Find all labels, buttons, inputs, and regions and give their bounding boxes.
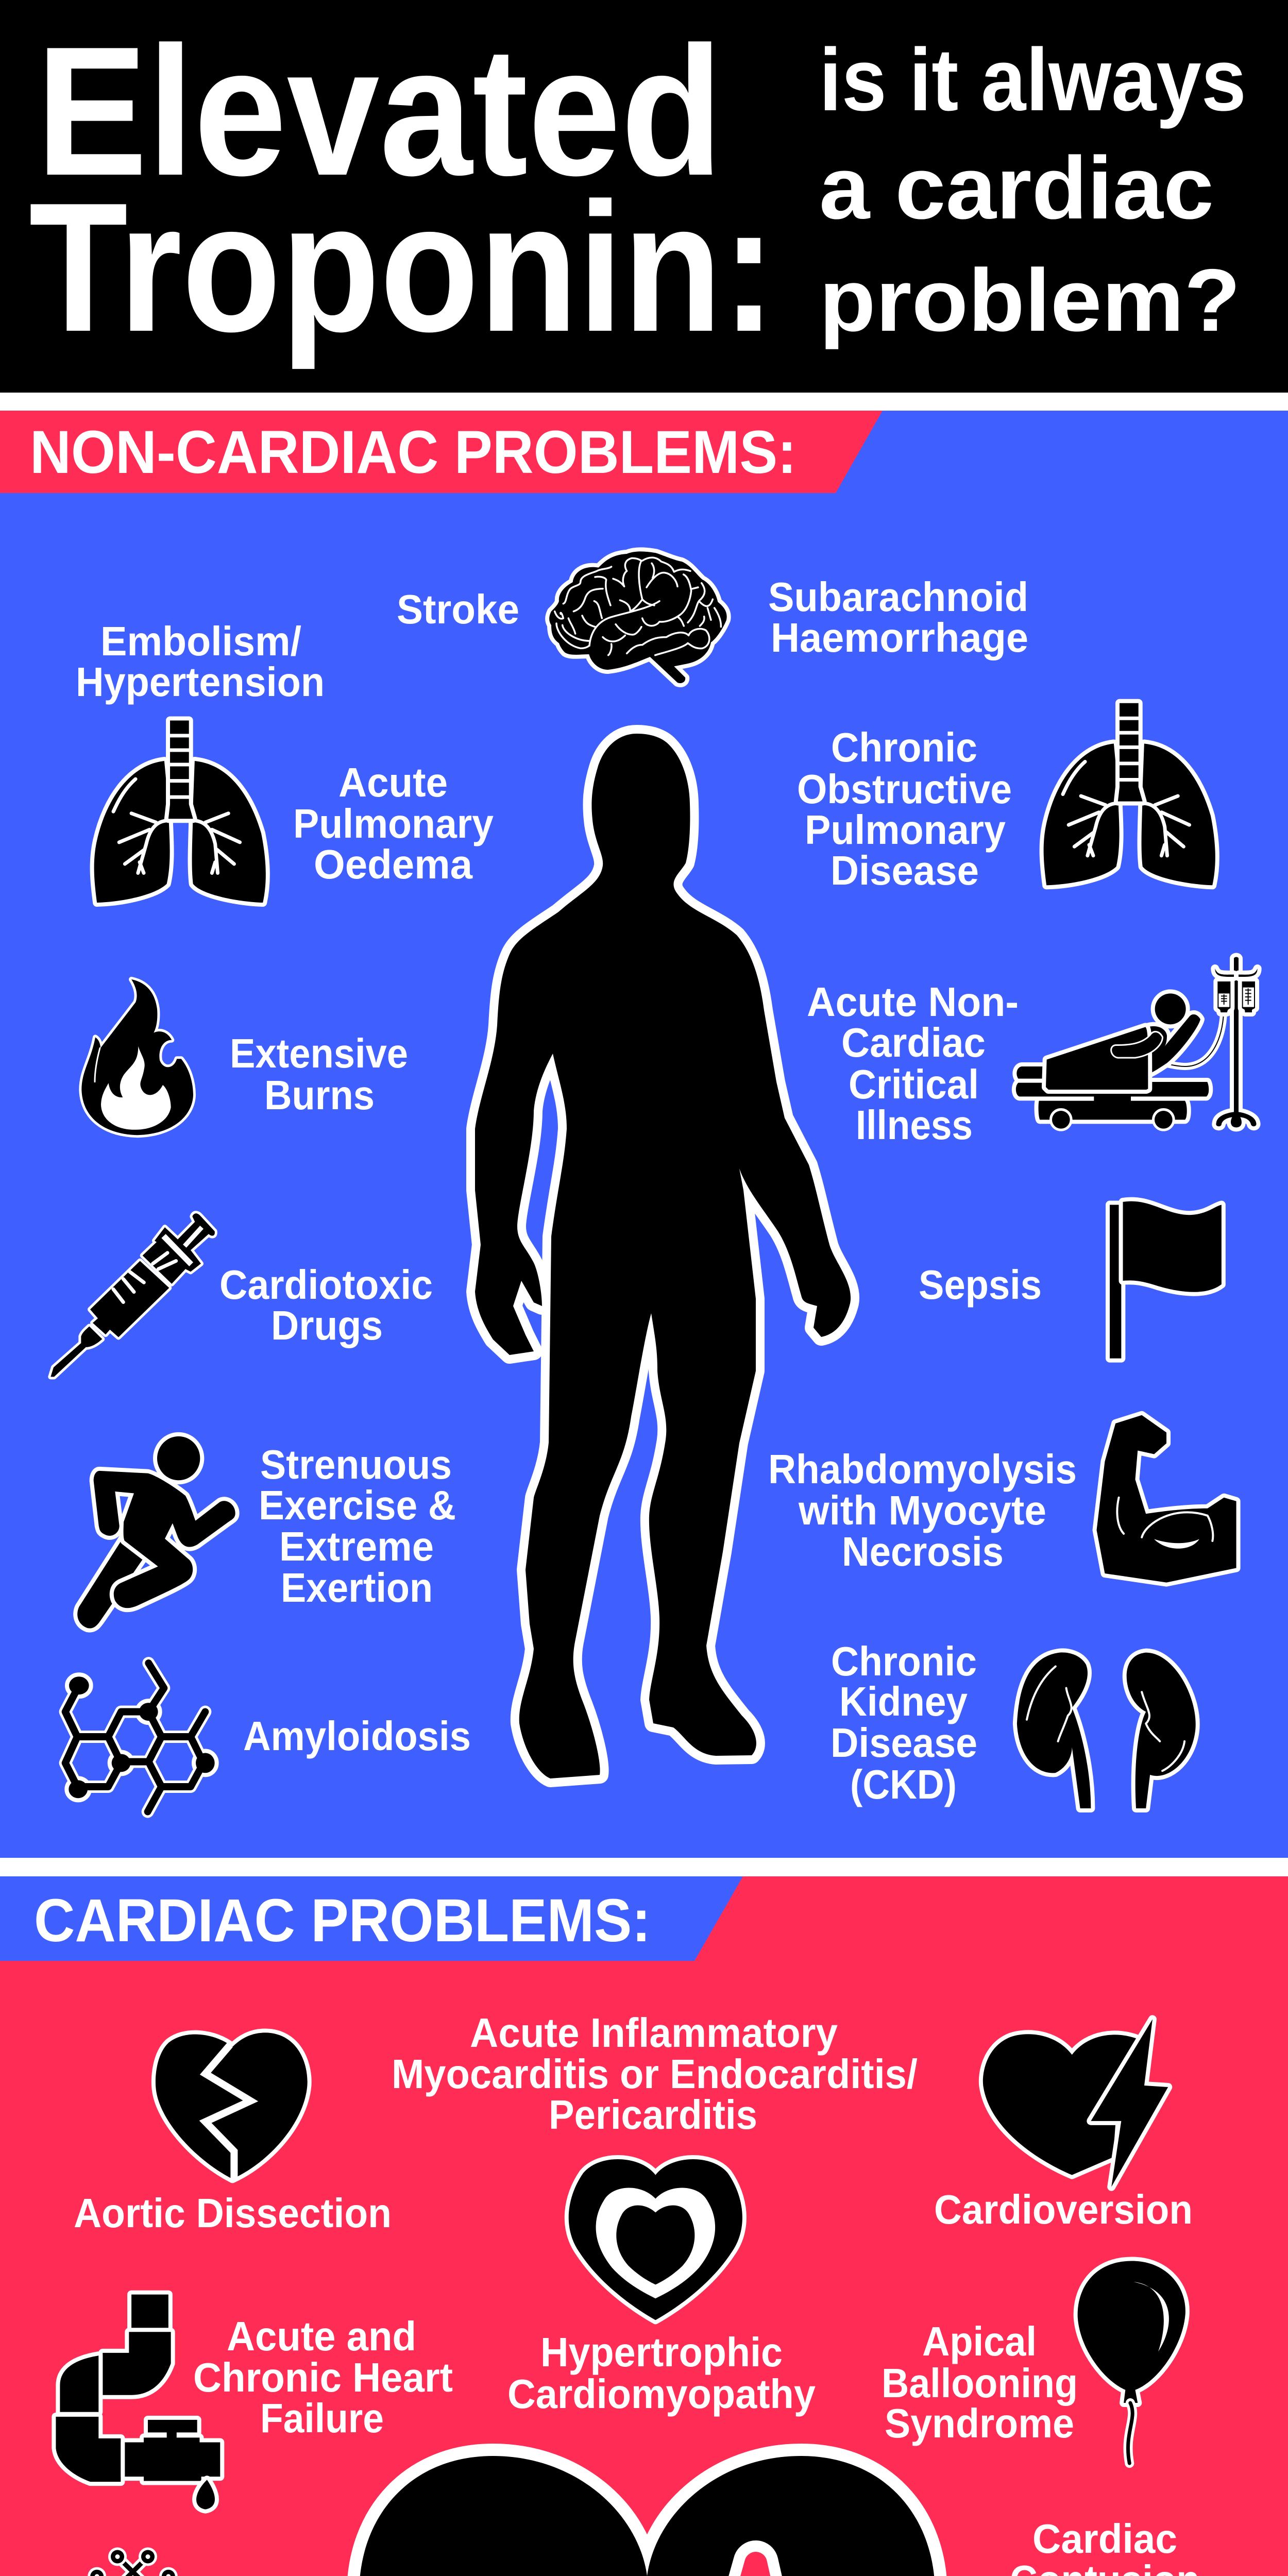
panel: cardiac problems [0, 1876, 1288, 2576]
label: Chronic Obstructive Pulmonary Disease: Disease [831, 848, 979, 893]
label: Rhabdomyolysis with Myocyte Necrosis: with Myocyte [798, 1487, 1046, 1533]
label: Strenuous Exercise & Extreme Exertion: Extreme [279, 1523, 434, 1569]
label: Hypertrophic Cardiomyopathy [507, 2329, 816, 2417]
label: Chronic Kidney Disease (CKD): (CKD) [850, 1761, 957, 1807]
subtitle: problem? [819, 251, 1241, 350]
label: Rhabdomyolysis with Myocyte Necrosis: Necrosis [842, 1529, 1004, 1574]
title [29, 8, 776, 371]
label: Hypertrophic Cardiomyopathy: Cardiomyopathy [507, 2371, 816, 2417]
subtitle: is it always [819, 30, 1246, 129]
label: Extensive Burns: Burns [264, 1072, 375, 1118]
label: Acute Pulmonary Oedema: Acute [338, 759, 448, 805]
icon: pipes and tap [56, 2295, 220, 2510]
label: Subarachnoid Haemorrhage: Haemorrhage [771, 615, 1028, 660]
label: Acute Inflammatory Myocarditis or Endocarditis/ Pericarditis: Acute Inflammatory [470, 2010, 838, 2056]
label: Chronic Kidney Disease (CKD): Disease [831, 1720, 977, 1766]
label: Chronic Obstructive Pulmonary Disease: Chronic [831, 724, 977, 770]
label: Chronic Obstructive Pulmonary Disease [797, 724, 1012, 893]
label: Rhabdomyolysis with Myocyte Necrosis [768, 1446, 1077, 1574]
label: Apical Ballooning Syndrome [882, 2318, 1078, 2446]
label: Subarachnoid Haemorrhage: Subarachnoid [768, 574, 1028, 620]
icon: balloon [1078, 2261, 1185, 2463]
panel: non-cardiac problems [0, 411, 1288, 1858]
icon: right lungs [1044, 703, 1215, 885]
label: Acute Non-Cardiac Critical Illness: Illness [856, 1102, 973, 1148]
icon: runner [77, 1436, 235, 1629]
label: Acute Inflammatory Myocarditis or Endocarditis/ Pericarditis: Myocarditis or Endocarditis/ [392, 2051, 918, 2097]
icon: stent mesh [58, 2556, 210, 2576]
label: Apical Ballooning Syndrome: Ballooning [882, 2360, 1078, 2406]
icon: brain [549, 551, 727, 683]
icon: broken heart [156, 2032, 308, 2179]
label: Acute Inflammatory Myocarditis or Endocarditis/ Pericarditis: Pericarditis [549, 2092, 757, 2138]
label: Cardiac Contusion from Trauma: Cardiac [1032, 2516, 1177, 2562]
icon: molecule [65, 1663, 215, 1811]
icon: left lungs [94, 720, 266, 903]
label: Acute and Chronic Heart Failure: Chronic Heart [193, 2354, 453, 2400]
label: Strenuous Exercise & Extreme Exertion [259, 1442, 456, 1611]
label: Apical Ballooning Syndrome: Apical [922, 2318, 1037, 2364]
title: Troponin: [29, 164, 776, 371]
banner: non-cardiac problems: NON-CARDIAC PROBLEMS: [30, 418, 796, 486]
label: Strenuous Exercise & Extreme Exertion: Exertion [281, 1565, 433, 1611]
label: Acute Non-Cardiac Critical Illness [807, 979, 1019, 1148]
icon: flame [81, 979, 193, 1135]
icon: flag [1110, 1201, 1222, 1359]
label: Aortic Dissection: Aortic Dissection [74, 2190, 392, 2236]
label: Subarachnoid Haemorrhage [768, 574, 1028, 660]
label: Chronic Kidney Disease (CKD): Chronic [831, 1638, 977, 1684]
label: Rhabdomyolysis with Myocyte Necrosis: Rhabdomyolysis [768, 1446, 1077, 1492]
label: Stroke: Stroke [397, 586, 519, 632]
icon: syringe [50, 1213, 215, 1377]
icon: hospital bed with patient and drip [1016, 957, 1258, 1129]
label: Amyloidosis: Amyloidosis [243, 1713, 471, 1759]
icon: kidneys [1017, 1652, 1196, 1808]
label: Cardiotoxic Drugs [219, 1262, 433, 1348]
label: Acute and Chronic Heart Failure: Failure [260, 2395, 384, 2441]
icon: flexed arm [1097, 1415, 1236, 1583]
label: Embolism/Hypertension: Embolism/ [100, 618, 301, 664]
human body silhouette [475, 734, 851, 1778]
subtitle [819, 30, 1246, 350]
icon: large heart with ECG trace [330, 2456, 969, 2576]
label: Strenuous Exercise & Extreme Exertion: Exercise & [259, 1482, 456, 1528]
label: Sepsis: Sepsis [919, 1262, 1042, 1308]
title: Elevated [36, 8, 723, 214]
label: Acute and Chronic Heart Failure [193, 2313, 453, 2441]
label: Hypertrophic Cardiomyopathy: Hypertrophic [540, 2329, 783, 2375]
label: Cardiotoxic Drugs: Drugs [271, 1302, 383, 1348]
banner: cardiac problems: CARDIAC PROBLEMS: [34, 1887, 651, 1955]
label: Acute and Chronic Heart Failure: Acute and [227, 2313, 416, 2359]
label: Acute Pulmonary Oedema: Oedema [314, 841, 472, 887]
subtitle: a cardiac [819, 139, 1214, 238]
label: Strenuous Exercise & Extreme Exertion: Strenuous [260, 1442, 452, 1487]
label: Apical Ballooning Syndrome: Syndrome [885, 2400, 1074, 2446]
label: Acute Non-Cardiac Critical Illness: Critical [849, 1061, 979, 1107]
label: Acute Non-Cardiac Critical Illness: Acute Non- [807, 979, 1019, 1025]
label: Cardiotoxic Drugs: Cardiotoxic [219, 1262, 433, 1308]
label: Embolism/Hypertension [76, 618, 325, 705]
icon: heart with lightning bolt [983, 2019, 1168, 2187]
label: Acute Non-Cardiac Critical Illness: Cardiac [841, 1020, 986, 1065]
label: Cardioversion: Cardioversion [934, 2187, 1193, 2232]
icon: hypertrophic heart [569, 2159, 742, 2320]
header panel [0, 0, 1288, 393]
label: Extensive Burns: Extensive [230, 1030, 408, 1076]
label: Chronic Obstructive Pulmonary Disease: Obstructive [797, 766, 1012, 812]
label: Acute Pulmonary Oedema: Pulmonary [293, 801, 494, 846]
label: Cardiac Contusion from Trauma [986, 2516, 1224, 2576]
label: Extensive Burns [230, 1030, 408, 1118]
label: Chronic Kidney Disease (CKD) [831, 1638, 977, 1807]
label: Acute Inflammatory Myocarditis or Endocarditis/ Pericarditis [392, 2010, 918, 2138]
label: Acute Pulmonary Oedema [293, 759, 494, 887]
label: Chronic Obstructive Pulmonary Disease: Pulmonary [805, 807, 1006, 853]
label: Chronic Kidney Disease (CKD): Kidney [839, 1679, 968, 1724]
label: Embolism/Hypertension: Hypertension [76, 659, 325, 705]
